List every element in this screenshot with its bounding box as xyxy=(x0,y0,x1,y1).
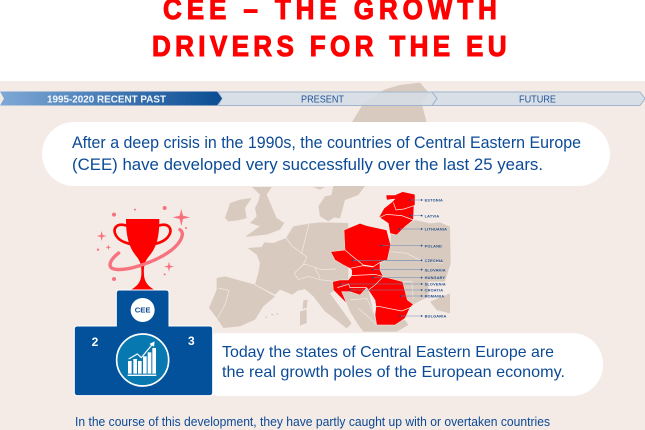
callout: intro: (CEE) have developed very successfully over the last 25 years. xyxy=(72,156,543,174)
map: leader lines and country labels: BULGARIA xyxy=(425,314,446,318)
map: leader lines and country labels: CROATIA xyxy=(425,289,443,293)
map: leader lines and country labels: POLAND xyxy=(425,244,442,248)
title xyxy=(152,0,507,62)
podium xyxy=(74,290,213,396)
podium numbers: 2 xyxy=(92,335,99,349)
callout: growth poles: Today the states of Central Eastern Europe are xyxy=(222,344,554,361)
trophy and podium xyxy=(74,206,213,396)
icon: trophy xyxy=(97,206,190,290)
podium numbers xyxy=(92,334,195,349)
callout: growth poles xyxy=(190,333,603,396)
map: leader lines and country labels: SLOVENIA xyxy=(425,283,446,287)
callout: growth poles: the real growth poles of the European economy. xyxy=(222,364,565,381)
title: DRIVERS FOR THE EU xyxy=(152,30,507,62)
map: leader lines and country labels: LATVIA xyxy=(425,214,439,218)
map: eastern Europe xyxy=(330,186,451,332)
map: northern Scandinavia xyxy=(352,83,429,125)
arrow: recent past xyxy=(0,92,222,106)
map: leader lines and country labels: ROMANIA xyxy=(425,294,444,298)
timeline arrows xyxy=(0,92,645,106)
map: leader lines and country labels: SLOVAKIA xyxy=(425,268,446,272)
map: leader lines and country labels: HUNGARY xyxy=(425,276,446,280)
CEE badge xyxy=(131,298,155,322)
timeline arrows: PRESENT xyxy=(301,94,344,106)
map: CEE countries highlighted xyxy=(331,192,415,325)
map of Europe xyxy=(209,186,451,332)
timeline arrows: FUTURE xyxy=(519,94,556,106)
arrow: future xyxy=(432,92,645,106)
Baltic states xyxy=(379,192,415,235)
bottom text: In the course of this development, they have partly caught up with or overtaken countries xyxy=(75,415,550,429)
arrow: present xyxy=(218,92,437,106)
CEE badge: CEE xyxy=(135,306,151,315)
map: leader lines and country labels xyxy=(339,198,447,318)
callout: intro: After a deep crisis in the 1990s, the countries of Central Eastern Europe xyxy=(72,134,581,152)
map: western Europe xyxy=(209,187,352,328)
icon: growth chart xyxy=(117,334,169,386)
Central and south-eastern states xyxy=(331,223,413,325)
callout: intro xyxy=(42,122,610,186)
map: leader lines and country labels: CZECHIA xyxy=(425,259,443,263)
map: leader lines and country labels: LITHUANIA xyxy=(425,227,447,231)
timeline arrows: 1995-2020 RECENT PAST xyxy=(47,94,166,106)
map: leader lines and country labels: ESTONIA xyxy=(425,198,443,202)
podium numbers: 3 xyxy=(188,334,195,348)
